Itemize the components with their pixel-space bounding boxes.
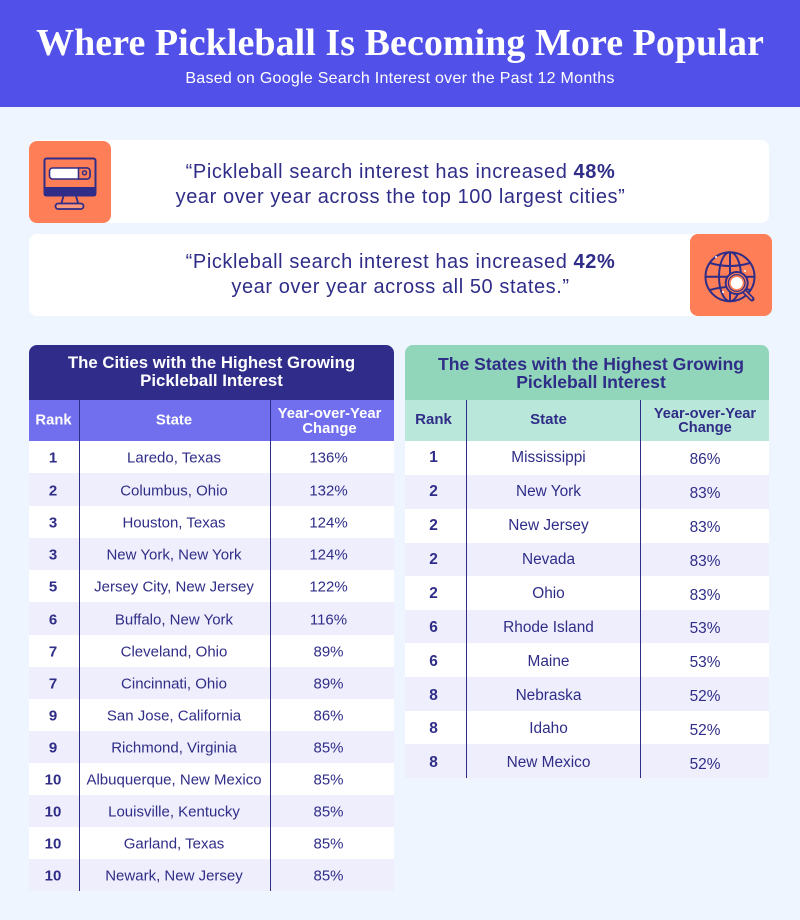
rows: cities: 10 (45, 772, 61, 788)
rows: cities: 3 (49, 546, 57, 564)
rows: cities: 3 (49, 514, 57, 532)
rows: cities: 7 (49, 676, 57, 692)
table title: The Cities with the Highest Growing (68, 353, 355, 372)
rows: cities: 89% (313, 644, 344, 660)
rows: cities: 9 (49, 708, 57, 724)
rows: cities: 7 (49, 644, 57, 660)
rows: cities: 5 (49, 578, 57, 596)
rows: cities: 136% (309, 450, 348, 466)
rows: cities: Cleveland, Ohio (121, 644, 227, 660)
rows: states: 53% (690, 654, 720, 671)
rows: states: Nebraska (516, 687, 581, 704)
rows: states: Ohio (532, 585, 565, 602)
rows: states: New Jersey (508, 517, 589, 534)
rows: cities: Cincinnati, Ohio (121, 676, 227, 692)
rows: cities: San Jose, California (107, 708, 241, 724)
rows: cities: 85% (313, 836, 344, 852)
rows: states: New Mexico (507, 754, 590, 771)
table title (405, 345, 769, 400)
rows: states: 83% (690, 485, 720, 502)
table title: Pickleball Interest (140, 371, 283, 390)
column headers (29, 400, 394, 441)
table: states (405, 345, 769, 441)
rows: cities: 9 (49, 740, 57, 756)
rows: cities: 85% (313, 772, 344, 788)
rows: cities: Newark, New Jersey (105, 868, 243, 884)
rows: states: 8 (429, 720, 438, 736)
rows: states: 83% (690, 587, 720, 604)
rows: states: Mississippi (511, 449, 586, 466)
rows: cities: 85% (313, 740, 344, 756)
icon: globe with magnifier (690, 234, 772, 316)
rows: cities: 89% (313, 676, 344, 692)
callout text (176, 161, 625, 208)
rows: states: 1 (429, 449, 438, 466)
rows: states: Maine (528, 653, 569, 670)
rows: cities: 86% (313, 708, 344, 724)
table: cities (29, 345, 394, 441)
rows: cities: 10 (45, 804, 61, 820)
rows: cities: 85% (313, 804, 344, 820)
rows: cities: Houston, Texas (122, 514, 226, 532)
rows: states: 52% (690, 756, 720, 773)
callout: cities stat (29, 140, 769, 223)
rows: states: 52% (690, 688, 720, 705)
column headers: State (156, 412, 192, 428)
rows: states: 6 (429, 618, 438, 636)
rows: cities: 124% (309, 514, 348, 532)
column headers: Rank (415, 411, 452, 428)
rows: cities: 124% (309, 546, 348, 564)
callout text: year over year across the top 100 largest cities” (176, 186, 625, 208)
rows: cities: 132% (309, 482, 348, 499)
rows: states: 83% (690, 519, 720, 536)
rows: cities: Garland, Texas (124, 836, 224, 852)
rows: states: 86% (690, 451, 720, 468)
rows: states: 2 (429, 517, 438, 534)
callout text: “Pickleball search interest has increased 42% (186, 251, 615, 273)
rows: cities: 6 (49, 611, 57, 628)
rows: states: 2 (429, 550, 438, 568)
column headers: State (530, 411, 567, 428)
rows: states: New York (516, 483, 581, 500)
rows: cities: Buffalo, New York (115, 611, 233, 628)
rows: cities: 122% (309, 578, 348, 596)
rows: cities: New York, New York (106, 546, 242, 564)
rows: states: 6 (429, 653, 438, 670)
rows: states: 52% (690, 722, 720, 738)
rows: states: 2 (429, 585, 438, 602)
header banner (0, 0, 800, 107)
column headers: Rank (35, 412, 72, 428)
rows: states: 83% (690, 552, 720, 570)
callout text: year over year across all 50 states.” (231, 276, 570, 298)
table title: The States with the Highest Growing (438, 354, 744, 374)
callout text: “Pickleball search interest has increased 48% (186, 161, 615, 183)
rows: cities: 116% (310, 611, 347, 628)
rows: cities: Albuquerque, New Mexico (86, 772, 262, 788)
rows: cities: 85% (313, 868, 344, 884)
callout: states stat (29, 234, 769, 316)
rows: cities: 2 (49, 482, 57, 499)
column headers: Change (302, 421, 357, 437)
rows: cities: 1 (49, 450, 57, 466)
rows: cities: Columbus, Ohio (120, 482, 228, 499)
title: Where Pickleball Is Becoming More Popular (36, 22, 764, 64)
rows: cities: Laredo, Texas (127, 450, 221, 466)
rows: cities: 10 (45, 836, 61, 852)
rows: cities: Richmond, Virginia (111, 740, 237, 756)
callout text (186, 251, 615, 298)
rows: states: 53% (690, 620, 720, 636)
rows: states: 8 (429, 687, 438, 704)
rows: cities: 10 (45, 868, 61, 884)
column headers: Change (678, 420, 732, 436)
rows: states: 8 (429, 754, 438, 771)
icon: computer search (29, 141, 111, 223)
rows: states: Rhode Island (503, 618, 594, 636)
subtitle: Based on Google Search Interest over the Past 12 Months (185, 70, 615, 87)
table title: Pickleball Interest (516, 372, 666, 392)
rows: states: Nevada (522, 550, 575, 568)
column headers (405, 400, 769, 441)
column headers: Year-over-Year (278, 406, 381, 422)
rows: states: Idaho (529, 720, 568, 736)
table title (29, 345, 394, 400)
rows: states: 2 (429, 483, 438, 500)
rows: cities: Jersey City, New Jersey (94, 578, 254, 596)
rows: cities: Louisville, Kentucky (108, 804, 240, 820)
column headers: Year-over-Year (654, 406, 756, 422)
